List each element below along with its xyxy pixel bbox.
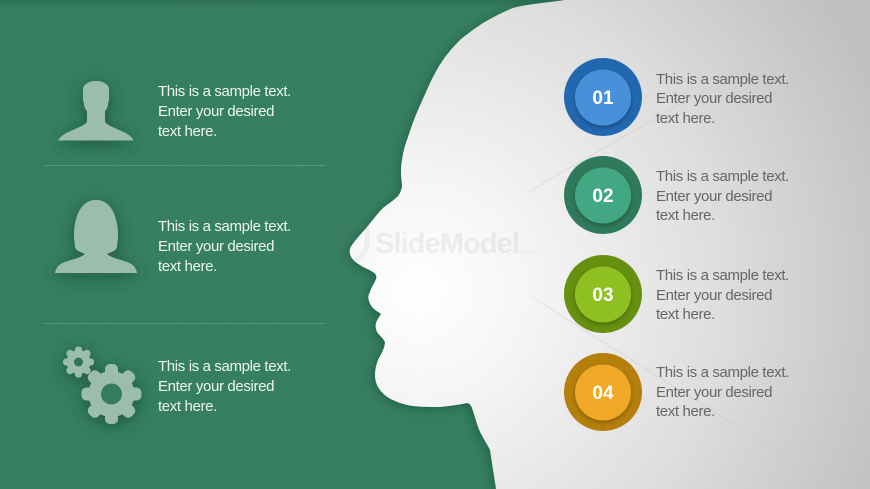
left item 2 text: text here. — [158, 258, 217, 275]
badge 02: 02 — [592, 186, 614, 207]
left item 2 text: This is a sample text. — [158, 218, 291, 235]
text 04: This is a sample text. — [656, 364, 789, 381]
left item 3 text: Enter your desired — [158, 378, 274, 395]
left item 1: male icon — [58, 81, 134, 140]
badge 04: 04 — [592, 383, 614, 404]
text 01: This is a sample text. — [656, 71, 789, 88]
left item 3: gears icon — [63, 346, 142, 424]
badge 01 — [564, 58, 642, 136]
small gear — [63, 346, 94, 378]
text 03: text here. — [656, 306, 715, 323]
text 04: Enter your desired — [656, 384, 772, 401]
text 01: text here. — [656, 110, 715, 127]
watermark: .com — [519, 246, 539, 256]
text 01: Enter your desired — [656, 90, 772, 107]
badge 03: 03 — [592, 285, 614, 306]
head silhouette — [350, 0, 870, 489]
left item 1 text: text here. — [158, 123, 217, 140]
divider — [44, 322, 326, 324]
left item 1 text: Enter your desired — [158, 103, 274, 120]
left item 2 text: Enter your desired — [158, 238, 274, 255]
badge 03 — [564, 255, 642, 333]
watermark: SlideModel — [375, 228, 519, 260]
text 04: text here. — [656, 403, 715, 420]
badge 01: 01 — [592, 88, 614, 109]
badge 02 — [564, 156, 642, 234]
text 03: This is a sample text. — [656, 267, 789, 284]
left item 2: female icon — [55, 200, 137, 273]
text 02: This is a sample text. — [656, 168, 789, 185]
watermark — [343, 226, 539, 262]
large gear — [82, 364, 142, 424]
left item 1 text: This is a sample text. — [158, 83, 291, 100]
badge 04 — [564, 353, 642, 431]
text 02: text here. — [656, 207, 715, 224]
faint background lines — [90, 60, 340, 450]
text 02: Enter your desired — [656, 188, 772, 205]
left item 3 text: text here. — [158, 398, 217, 415]
text 03: Enter your desired — [656, 287, 772, 304]
divider — [44, 164, 326, 166]
left item 3 text: This is a sample text. — [158, 358, 291, 375]
